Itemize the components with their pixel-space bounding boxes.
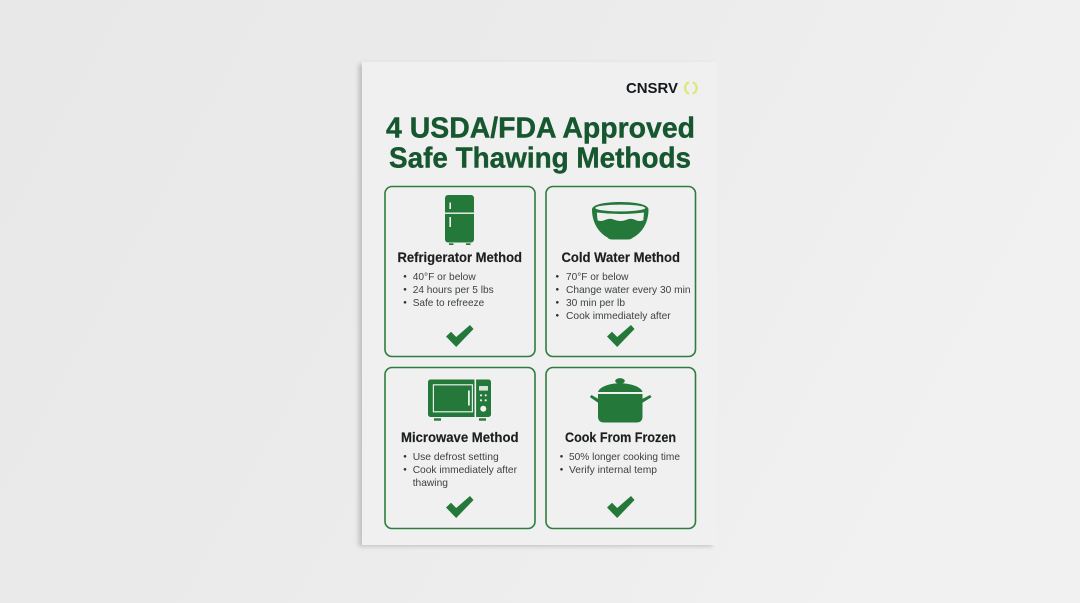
- list: cold water facts: Cook immediately after: [566, 311, 671, 322]
- list: cold water facts: Change water every 30 min: [566, 285, 691, 296]
- list: cook from frozen facts: 50% longer cooking time: [569, 452, 680, 463]
- list: refrigerator facts: Safe to refreeze: [413, 298, 484, 309]
- list: refrigerator facts: [404, 272, 494, 309]
- list: microwave facts: Cook immediately after: [413, 465, 518, 476]
- panel: refrigerator method: [385, 186, 535, 356]
- panel: cook from frozen: [546, 368, 696, 528]
- heading: cook from frozen: Cook From Frozen: [565, 430, 676, 445]
- list: cold water facts: 30 min per lb: [566, 298, 625, 309]
- icon: checkmark: [607, 496, 634, 518]
- panel: cold water method: [546, 186, 696, 356]
- icon: checkmark: [446, 325, 474, 347]
- heading: microwave method: Microwave Method: [401, 430, 518, 445]
- panel: microwave method: [385, 368, 535, 528]
- icon: microwave: [428, 380, 491, 421]
- logo: CNSRV: CNSRV: [626, 80, 678, 97]
- icon: cooking pot: [590, 378, 651, 422]
- list: microwave facts: thawing: [413, 478, 448, 489]
- icon: refrigerator: [445, 195, 474, 245]
- list: cold water facts: [556, 272, 691, 322]
- icon: checkmark: [607, 325, 634, 347]
- heading: cold water method: Cold Water Method: [562, 250, 680, 265]
- list: cold water facts: 70°F or below: [566, 272, 629, 283]
- title: Safe Thawing Methods: [389, 142, 691, 174]
- list: cook from frozen facts: [560, 452, 680, 476]
- list: refrigerator facts: 40°F or below: [413, 272, 476, 283]
- list: microwave facts: [404, 452, 518, 489]
- list: cook from frozen facts: Verify internal temp: [569, 465, 657, 476]
- list: refrigerator facts: 24 hours per 5 lbs: [413, 285, 494, 296]
- icon: bowl of water: [592, 202, 648, 240]
- icon: checkmark: [446, 496, 474, 518]
- poster sheet: [358, 62, 717, 546]
- title: 4 USDA/FDA Approved: [386, 112, 695, 144]
- list: microwave facts: Use defrost setting: [413, 452, 499, 463]
- heading: refrigerator method: Refrigerator Method: [398, 250, 522, 265]
- title: [386, 112, 695, 174]
